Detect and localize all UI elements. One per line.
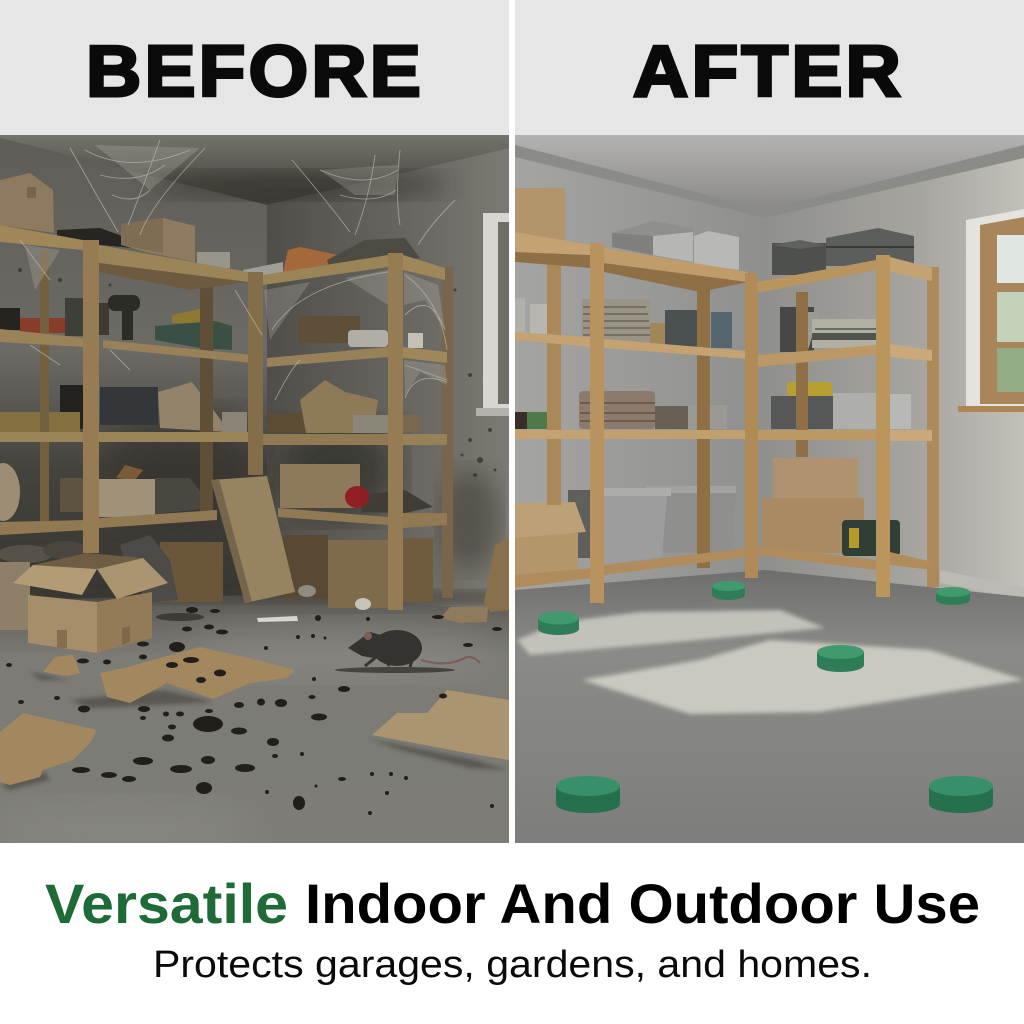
room: walls, ceiling, floor xyxy=(0,135,509,860)
cobwebs xyxy=(20,140,455,400)
header band: after xyxy=(515,0,1024,135)
bottom shelf boxes and bins xyxy=(515,458,900,575)
wooden shelving, left unit xyxy=(515,232,758,603)
green block xyxy=(538,612,579,635)
green block xyxy=(936,587,970,605)
dense web patches xyxy=(25,145,447,395)
items on third shelves xyxy=(515,382,911,429)
green block xyxy=(817,645,864,672)
storage boxes on top shelves xyxy=(515,188,914,275)
green block xyxy=(712,581,745,600)
icon: rat xyxy=(335,630,480,673)
sunlight patches on floor xyxy=(517,610,1024,714)
storage items on upper shelves xyxy=(0,173,423,433)
wooden shelving, left unit xyxy=(0,225,263,553)
leaning cardboard sheet xyxy=(211,476,295,603)
heading: after: AFTER xyxy=(633,32,904,112)
panel: after photo, clean garage xyxy=(515,135,1024,843)
shadows under floor cardboard xyxy=(0,672,509,790)
large open cardboard box xyxy=(13,553,168,653)
wooden shelving, right unit xyxy=(757,255,939,597)
header band: before xyxy=(0,0,509,135)
title: Indoor And Outdoor Use xyxy=(305,872,980,935)
title: Versatile xyxy=(45,872,288,935)
room: walls, ceiling, floor xyxy=(515,135,1024,843)
stack of folded papers xyxy=(582,299,650,342)
green block xyxy=(929,776,993,813)
torn cardboard on floor xyxy=(0,585,509,785)
window xyxy=(958,209,1024,412)
wooden shelving, right unit xyxy=(263,253,453,610)
droppings on floor xyxy=(6,607,502,815)
window, grimy xyxy=(476,213,509,416)
panel: before photo, dirty garage xyxy=(0,135,509,860)
green block xyxy=(556,776,620,813)
stack of books xyxy=(812,319,876,348)
heading: before: BEFORE xyxy=(86,32,424,112)
items on second shelves xyxy=(515,298,876,352)
storage items on lower shelves xyxy=(0,463,509,630)
subtitle: Protects garages, gardens, and homes. xyxy=(153,944,872,986)
icon: green bait blocks xyxy=(538,581,993,813)
mould specks on wall xyxy=(18,268,496,477)
